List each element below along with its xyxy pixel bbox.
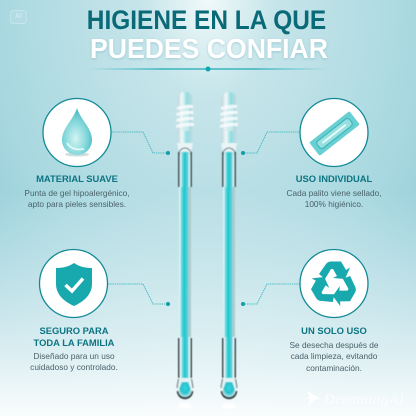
- text: material suave: apto para pieles sensibles.: [28, 199, 126, 209]
- text: material suave: Punta de gel hipoalergénico,: [24, 188, 130, 198]
- title line 2: PUEDES CONFIAR: [90, 33, 328, 64]
- watermark logo: [306, 392, 320, 406]
- text: uso individual: 100% higiénico.: [305, 199, 363, 209]
- text: un solo uso: cada limpieza, evitando: [291, 351, 377, 361]
- watermark text: DreamingAI: [324, 392, 404, 408]
- AI badge: [10, 10, 27, 24]
- text: seguro: [30, 351, 118, 372]
- heading: un solo uso: UN SOLO USO: [301, 325, 367, 336]
- heading: uso individual: USO INDIVIDUAL: [296, 173, 372, 184]
- text: un solo uso: contaminación.: [306, 363, 362, 373]
- text: seguro: Diseñado para un uso: [33, 351, 115, 361]
- heading: seguro para toda la familia: SEGURO PARA: [39, 325, 109, 336]
- text: seguro: cuidadoso y controlado.: [30, 362, 118, 372]
- heading: material suave: MATERIAL SUAVE: [36, 173, 118, 184]
- text: uso individual: [286, 188, 382, 209]
- heading: seguro para toda la familia: [34, 325, 114, 348]
- title: [87, 5, 328, 64]
- text: un solo uso: [289, 340, 379, 373]
- watermark: [306, 392, 404, 408]
- text: material suave: [24, 188, 130, 209]
- title line 1: HIGIENE EN LA QUE: [87, 5, 326, 35]
- text: uso individual: Cada palito viene sellado,: [286, 188, 382, 198]
- heading: seguro para toda la familia: TODA LA FAMILIA: [34, 336, 114, 348]
- AI badge: AI: [15, 13, 22, 20]
- text: un solo uso: Se desecha después de: [289, 340, 379, 350]
